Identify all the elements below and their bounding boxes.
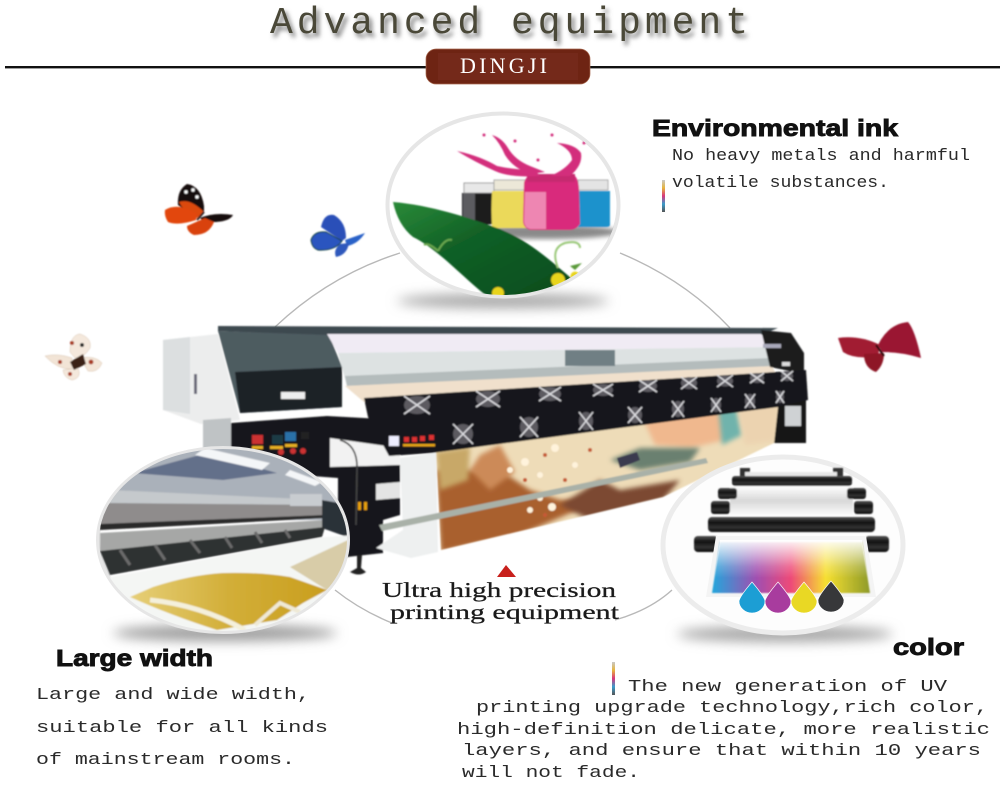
fans lower row [453,391,784,444]
shadow [113,625,337,641]
title: Advanced equipment [273,6,751,49]
text block: color: will not fade. [462,764,640,783]
header rule [5,66,1000,68]
right end [761,330,804,374]
ink drops [739,581,844,613]
text block: color: high-definition delicate, more realistic [457,721,990,740]
paper [110,534,347,631]
jar: black [462,193,495,226]
disc [388,114,618,296]
jar: magenta [523,174,580,230]
connector arcs [275,253,730,623]
poster [436,407,778,550]
text block: environmental ink: Environmental ink [652,115,898,141]
shadow [677,626,893,642]
tube [340,440,357,525]
text block: environmental ink [652,115,970,212]
text block: color: printing upgrade technology,rich color, [476,699,988,718]
stand and control panel [203,418,231,450]
gantry rail [101,502,323,524]
title: Advanced equipment [270,2,748,45]
text block: environmental ink: No heavy metals and harmful [672,147,970,166]
badge: DINGJI [426,49,590,84]
flowers [551,273,565,287]
text block: large width: Large width [56,645,213,671]
jar: yellow [492,191,527,228]
front fan bar [364,370,808,456]
colour marker [662,180,665,212]
jar shadow [470,225,620,239]
butterfly: crimson [838,322,921,372]
blank paper roll end [376,453,438,558]
text block: large width: of mainstream rooms. [36,751,295,770]
printer [163,326,808,574]
rollers [694,468,889,552]
right legs [774,390,806,443]
butterfly: blue [311,215,365,257]
fans top row [404,371,793,414]
center caption [382,565,619,624]
text block: environmental ink: volatile substances. [672,174,889,193]
text block: color: color [893,634,964,660]
red triangle [497,565,516,577]
colour marker [612,662,615,695]
sprouts [424,240,452,251]
badge: DINGJI: DINGJI [460,53,547,78]
disc [663,457,903,633]
text block: large width [36,645,328,770]
center caption: printing equipment [390,600,619,624]
text block: large width: Large and wide width, [36,686,310,705]
front bar buttons [389,435,435,446]
circle: color printing [663,457,903,642]
dark left cover [218,331,342,413]
disc [98,448,348,632]
green leaf [393,202,577,298]
left housing [163,334,240,424]
ink splash [457,151,540,176]
carriage window [338,347,772,386]
jar: cyan [578,191,610,227]
text block: large width: suitable for all kinds [36,719,328,738]
paper roll bar [379,458,708,531]
butterfly: pale [45,334,102,380]
text block: color: The new generation of UV [628,678,948,697]
upper frame bar [218,326,778,336]
carriage row [100,527,325,575]
butterfly: orange [165,184,233,235]
text block: color: layers, and ensure that within 10 years [462,742,981,761]
shadow [397,294,609,308]
upper panel [327,334,770,353]
circle: large width [95,445,355,641]
foot [350,555,366,574]
center caption: Ultra high precision [382,578,617,602]
paper gradient [706,536,876,597]
head block [290,494,322,506]
text block: color [457,634,990,783]
circle: environmental ink [388,114,620,308]
